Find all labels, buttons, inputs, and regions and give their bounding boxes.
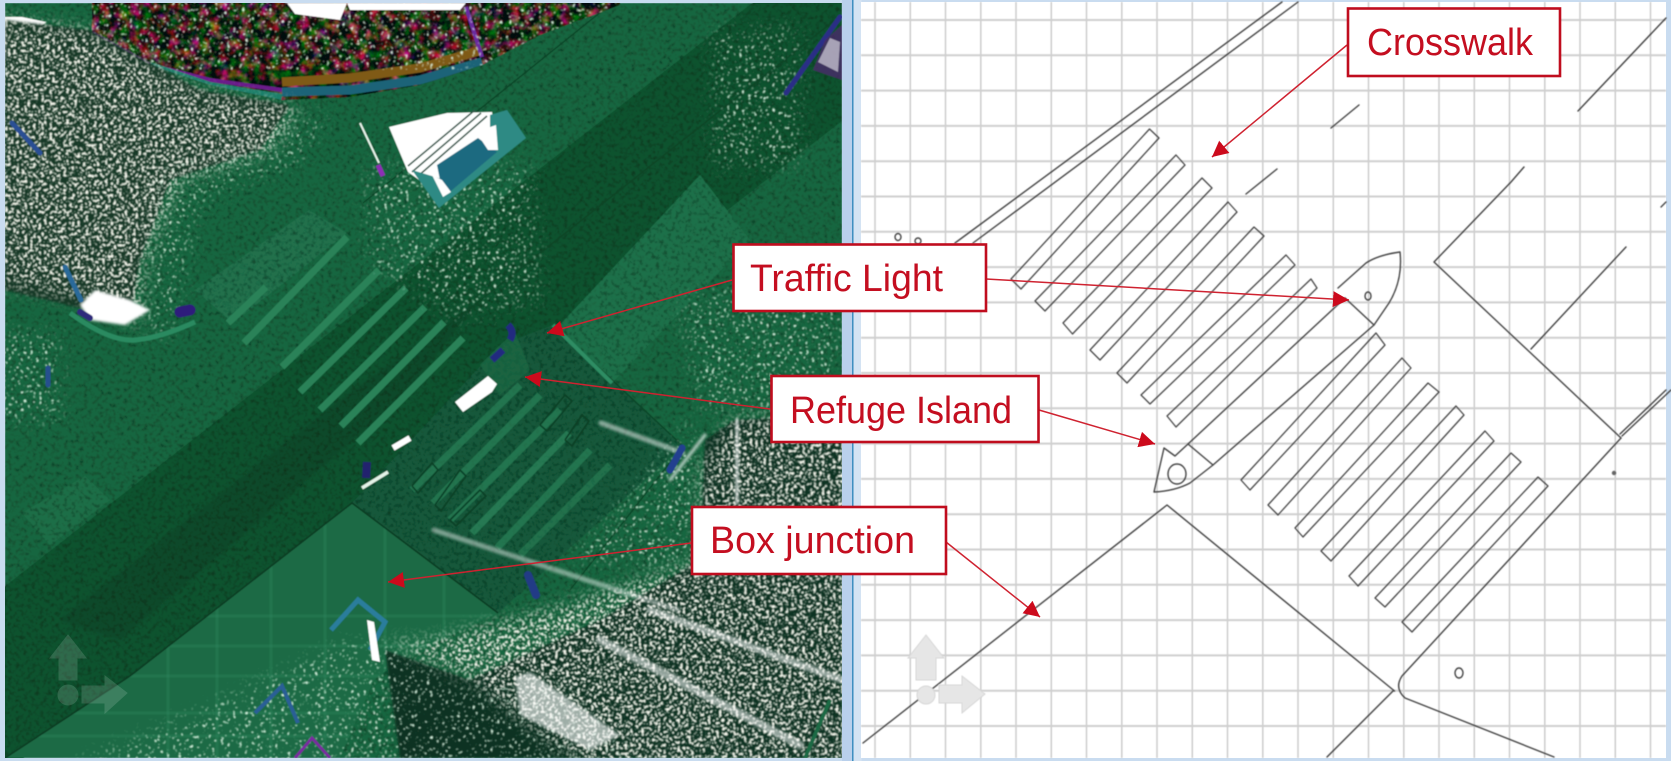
bright road markings in scatter xyxy=(434,420,842,745)
callout: box junction: Box junction xyxy=(710,520,915,562)
lower crossing zone xyxy=(352,325,683,613)
approach band upper crossing xyxy=(195,210,347,323)
arrow: traffic light right xyxy=(986,279,1349,300)
panel divider xyxy=(842,0,862,761)
arrow: crosswalk xyxy=(1212,45,1347,157)
sparse point scatter xyxy=(0,0,850,766)
teal traffic post outline xyxy=(331,600,385,650)
panel: vector map view xyxy=(861,2,1671,758)
teal shelter xyxy=(412,110,526,208)
short road dashes xyxy=(1246,18,1666,207)
lower crosswalk stripes xyxy=(412,385,610,555)
white post highlight xyxy=(367,620,380,662)
lower right kerb with fillet xyxy=(1399,438,1621,757)
arrow: traffic light left xyxy=(547,280,732,333)
shelter white highlights xyxy=(481,124,499,151)
road surface base xyxy=(5,3,842,758)
blue and purple poles xyxy=(12,17,840,595)
shelter inner dark panel xyxy=(437,138,497,196)
upper crosswalk stripes xyxy=(228,237,463,443)
purple post xyxy=(378,165,383,176)
thin white kerb mark xyxy=(360,123,379,163)
grid xyxy=(861,2,1666,758)
left corner white blob xyxy=(80,290,150,325)
lower crosswalk stripes xyxy=(1241,333,1548,632)
road surface grain xyxy=(5,3,842,758)
dark carriageway band xyxy=(0,0,842,766)
road edge lines xyxy=(363,3,835,590)
white strip under image xyxy=(0,761,1671,766)
building roof colored points xyxy=(85,0,625,105)
white road patch xyxy=(515,672,620,750)
upper refuge island xyxy=(1338,252,1401,325)
upper crosswalk stripes xyxy=(1011,129,1317,427)
lower refuge island xyxy=(1154,444,1213,492)
coordinate icon right xyxy=(908,635,985,713)
white gaps above building xyxy=(287,3,347,20)
small map circles xyxy=(895,234,1616,678)
left curb curve xyxy=(70,313,195,340)
small purple object bottom xyxy=(295,738,330,758)
pole right bottom xyxy=(805,700,830,758)
arrow: refuge island left xyxy=(525,377,770,409)
arrow: box junction right xyxy=(946,542,1040,617)
lower kerb branch xyxy=(1327,691,1393,757)
white roof of shelter xyxy=(388,111,494,181)
dark base under right scatter xyxy=(385,415,842,758)
right road branch xyxy=(1531,247,1626,349)
dark base under left scatter xyxy=(5,20,290,320)
upper refuge island objects xyxy=(455,325,530,412)
box junction painted grid xyxy=(0,500,520,760)
callout: box junction xyxy=(692,507,946,574)
arrow: refuge island right xyxy=(1039,410,1155,444)
callout: refuge island: Refuge Island xyxy=(790,390,1012,432)
shelter stripes xyxy=(408,110,487,177)
lighter pavement patch right xyxy=(555,175,750,383)
arrow: box junction left xyxy=(388,543,691,582)
blue post outline lower xyxy=(255,686,298,723)
road edge double line xyxy=(955,2,1298,243)
right corner kerb xyxy=(1434,167,1621,438)
callout: traffic light xyxy=(734,244,986,311)
lighter pavement patch left xyxy=(22,476,110,545)
top right white and purple points xyxy=(813,25,842,80)
map linework xyxy=(863,2,1671,757)
right double edge xyxy=(1620,390,1671,436)
panel: point cloud view xyxy=(0,0,850,766)
box junction outline xyxy=(5,503,498,758)
box junction area xyxy=(5,503,498,758)
callout: crosswalk: Crosswalk xyxy=(1367,22,1534,64)
callout: refuge island xyxy=(772,376,1038,442)
lower refuge island objects xyxy=(362,438,410,488)
callout: crosswalk xyxy=(1348,8,1560,76)
darker road centre xyxy=(60,300,480,640)
median lines between islands xyxy=(1188,298,1374,465)
box junction outline xyxy=(863,505,1394,743)
callout: traffic light: Traffic Light xyxy=(750,258,943,300)
dense point scatter xyxy=(0,0,850,766)
coordinate icon left xyxy=(50,635,127,713)
bright stop line xyxy=(553,325,612,383)
top right white specks xyxy=(818,38,840,72)
